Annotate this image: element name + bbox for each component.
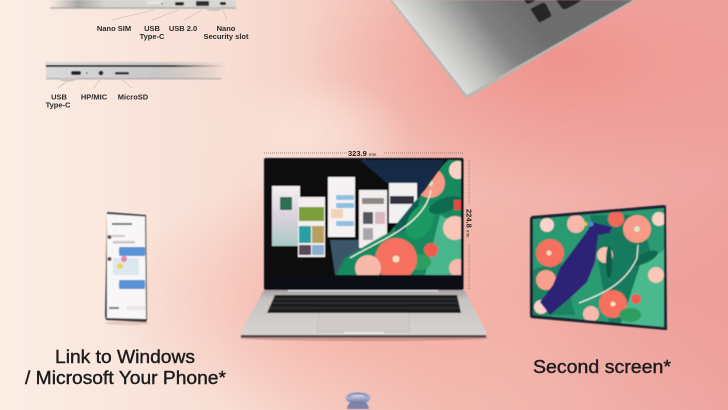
port labels: USB: [144, 24, 160, 33]
height dimension: [464, 160, 474, 290]
height dimension: 224.8 mm: [464, 209, 474, 238]
laptop base: [240, 290, 488, 341]
leader lines: [112, 10, 227, 20]
floral wallpaper: [335, 159, 462, 276]
leader lines: [58, 78, 132, 88]
width dimension: 323.9 mm: [348, 149, 377, 158]
caption: Link to Windows: [25, 347, 226, 388]
caption: Link to Windows: / Microsoft Your Phone*: [25, 368, 226, 388]
laptop side body: [50, 0, 236, 11]
port labels: Nano: [217, 24, 236, 33]
center laptop: [240, 158, 488, 341]
port labels: [97, 24, 249, 41]
bird: [540, 222, 612, 315]
webcam: [363, 159, 365, 161]
earbuds: [346, 392, 370, 409]
screen wallpaper: [267, 160, 461, 275]
phone: [105, 212, 149, 325]
caption: Link to Windows: Link to Windows: [55, 347, 195, 367]
port view: left side: [45, 62, 227, 110]
port labels: HP/MIC: [81, 92, 108, 102]
caption: Second screen: Second screen*: [533, 357, 671, 377]
chat content: [108, 223, 145, 310]
tablet: [530, 205, 667, 330]
tablet screen art: [530, 205, 667, 330]
app windows: [272, 177, 417, 257]
port labels: [46, 92, 149, 110]
port labels: Type-C: [46, 100, 71, 110]
port labels: Nano SIM: [97, 24, 131, 33]
port labels: USB 2.0: [169, 24, 197, 33]
port labels: Security slot: [203, 32, 249, 41]
port labels: Type-C: [140, 32, 165, 41]
laptop side body: [45, 62, 227, 82]
laptop lid: [264, 158, 464, 290]
port labels: MicroSD: [118, 92, 149, 102]
port labels: USB: [51, 92, 67, 102]
port view: right side: [50, 0, 249, 41]
keyboard keys: [524, 0, 582, 22]
top laptop corner, tilted: [390, 0, 636, 98]
